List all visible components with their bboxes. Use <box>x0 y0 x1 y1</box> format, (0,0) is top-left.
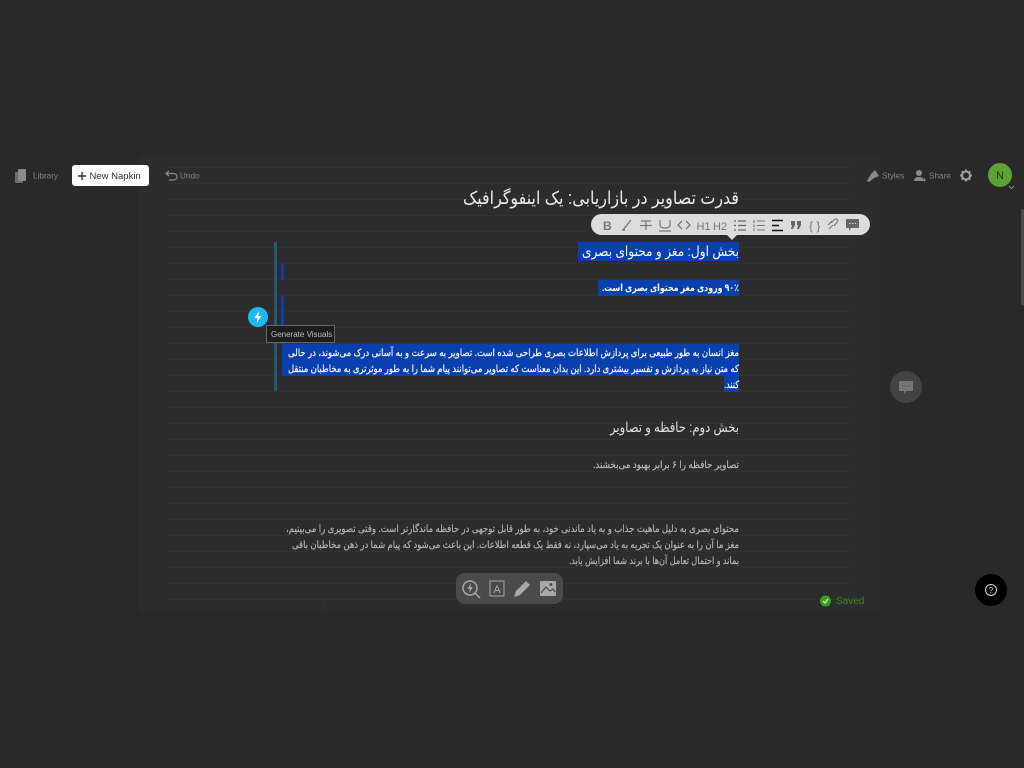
button: help: ? <box>989 586 994 595</box>
button: library <box>15 169 59 183</box>
button: undo <box>166 171 200 180</box>
formatting toolbar: H2 <box>713 221 727 233</box>
section one statistic <box>598 280 739 296</box>
button: undo: Undo <box>180 172 200 180</box>
button: library: Library <box>33 172 59 180</box>
sidebar marker: blue selection bar 2 <box>281 296 284 344</box>
section one statistic: ۹۰٪ ورودی مغز محتوای بصری است. <box>602 283 739 294</box>
panel: editor canvas <box>139 155 880 612</box>
button: help <box>975 574 1007 606</box>
formatting toolbar: H1 <box>696 221 711 233</box>
section one heading: بخش اول: مغز و محتوای بصری <box>582 243 739 260</box>
section two paragraph: بماند و احتمال تعامل آن‌ها با برند شما افزایش یابد. <box>569 554 739 567</box>
scrollbar <box>1021 209 1024 305</box>
sidebar marker: teal block bar <box>274 242 277 391</box>
formatting toolbar: B <box>603 219 612 233</box>
icon: pen <box>514 581 530 597</box>
button: styles <box>867 170 904 182</box>
section two paragraph <box>286 523 739 567</box>
icon: settings gear <box>960 170 972 182</box>
sidebar marker: blue selection bar 1 <box>281 264 284 280</box>
formatting toolbar <box>591 214 870 240</box>
title: قدرت تصاویر در بازاریابی: یک اینفوگرافیک <box>463 187 739 209</box>
formatting toolbar: { } <box>809 219 820 233</box>
tooltip: generate visuals: Generate Visuals <box>271 330 332 339</box>
insert toolbar <box>456 573 563 604</box>
tooltip: generate visuals <box>266 326 334 342</box>
button: share: Share <box>929 172 951 180</box>
section two heading: بخش دوم: حافظه و تصاویر <box>609 419 739 436</box>
section two statistic: تصاویر حافظه را ۶ برابر بهبود می‌بخشند. <box>593 460 739 471</box>
avatar: user N <box>988 163 1014 188</box>
button: new napkin: New Napkin <box>90 171 141 182</box>
section one paragraph: کنند. <box>724 380 739 391</box>
section one paragraph: که متن نیاز به پردازش و تفسیر بیشتری دارد. این بدان معناست که تصاویر می‌توانند پیام شما را به طور موثرتری به مخاطبان منتقل <box>288 364 739 375</box>
section two paragraph: مغز ما آن را به عنوان یک تجربه به یاد می‌سپارد، نه فقط یک قطعه اطلاعات. این باعث می‌شود که پیام شما در ذهن مخاطبان باقی <box>292 538 739 551</box>
status: saved <box>820 596 864 607</box>
icon: lightning search <box>463 581 480 598</box>
button: generate visuals lightning <box>248 307 268 327</box>
button: comments <box>890 371 922 403</box>
icon: image <box>540 581 556 596</box>
section one paragraph: مغز انسان به طور طبیعی برای پردازش اطلاعات بصری طراحی شده است. تصاویر به سرعت و به آسانی درک می‌شوند، در حالی <box>288 346 739 359</box>
button: styles: Styles <box>882 172 904 180</box>
icon: text box: A <box>493 584 501 596</box>
button: new napkin <box>72 165 149 186</box>
avatar: user N: N <box>996 170 1004 182</box>
status: saved: Saved <box>836 596 864 607</box>
section two paragraph: محتوای بصری به دلیل ماهیت جذاب و به یاد ماندنی خود، به طور قابل توجهی در حافظه ماندگارتر است. وقتی تصویری را می‌بینیم، <box>286 523 739 535</box>
button: share <box>914 170 951 182</box>
section one paragraph <box>282 344 739 392</box>
